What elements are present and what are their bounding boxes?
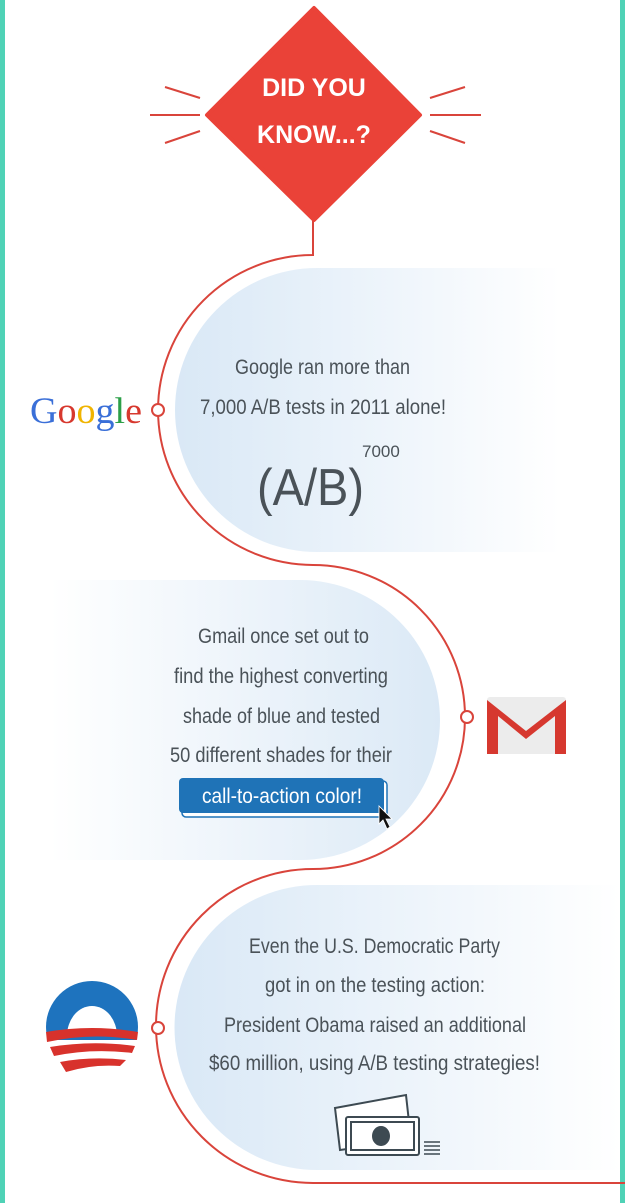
text: obama fact bbox=[209, 935, 540, 1075]
panel: card obama bbox=[174, 885, 620, 1170]
text: gmail fact: shade of blue and tested bbox=[183, 705, 380, 728]
button: call to action bbox=[179, 778, 392, 829]
panel: card gmail bbox=[50, 580, 440, 860]
icon: money bbox=[335, 1095, 440, 1155]
timeline line bbox=[156, 220, 625, 1183]
diamond: did you know: DID YOU bbox=[262, 74, 366, 102]
text: obama fact: $60 million, using A/B testing strategies! bbox=[209, 1052, 540, 1075]
icon: rays bbox=[150, 87, 481, 143]
text: obama fact: President Obama raised an additional bbox=[224, 1014, 526, 1037]
text: gmail fact: Gmail once set out to bbox=[198, 625, 369, 648]
icon: timeline node google bbox=[152, 404, 164, 416]
button: call to action: call-to-action color! bbox=[202, 785, 362, 808]
icon: A/B power: 7000 bbox=[362, 442, 400, 461]
text: gmail fact bbox=[170, 625, 392, 767]
diamond: did you know: KNOW...? bbox=[257, 121, 371, 149]
text: obama fact: Even the U.S. Democratic Party bbox=[249, 935, 500, 958]
icon: gmail bbox=[487, 697, 566, 754]
text: obama fact: got in on the testing action: bbox=[265, 974, 485, 997]
panel: card google bbox=[175, 268, 560, 552]
icon: google logo: Google bbox=[30, 391, 142, 432]
icon: A/B power: (A/B) bbox=[257, 459, 364, 517]
icon: timeline node obama bbox=[152, 1022, 164, 1034]
text: google fact: Google ran more than bbox=[235, 356, 410, 379]
text: gmail fact: 50 different shades for their bbox=[170, 744, 392, 767]
icon: timeline node gmail bbox=[461, 711, 473, 723]
icon: obama logo bbox=[44, 981, 140, 1088]
diamond: did you know bbox=[207, 8, 420, 220]
text: gmail fact: find the highest converting bbox=[174, 665, 388, 688]
icon: A/B power bbox=[257, 442, 400, 517]
text: google fact bbox=[200, 356, 446, 419]
text: google fact: 7,000 A/B tests in 2011 alone! bbox=[200, 396, 446, 419]
